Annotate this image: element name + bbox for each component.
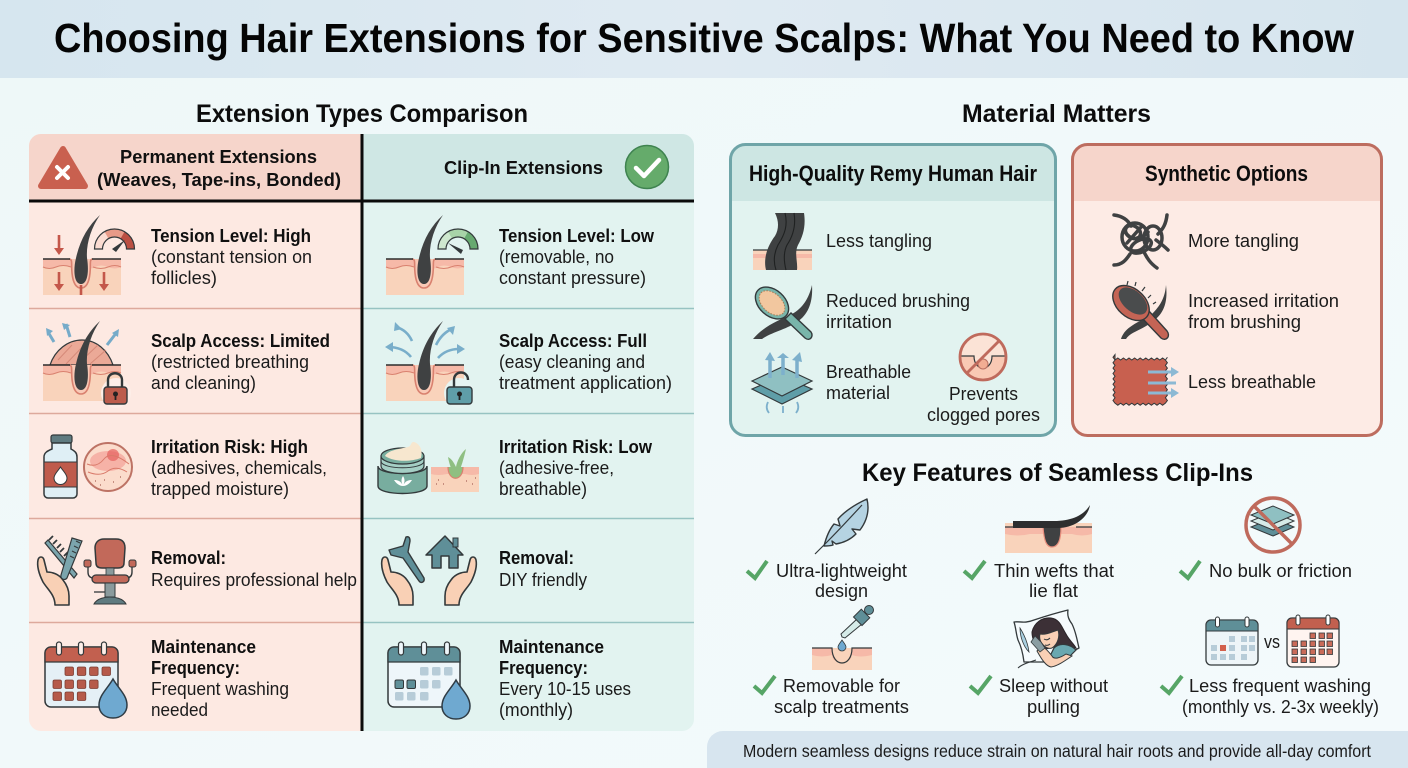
text: tension level low: Tension Level: Low	[499, 226, 655, 246]
text: maintenance monthly: (monthly)	[499, 700, 573, 720]
feature: thin wefts	[964, 505, 1114, 601]
text: irritation risk low: Irritation Risk: Low	[499, 437, 653, 457]
text: irritation risk high: trapped moisture)	[151, 479, 289, 499]
text: maintenance monthly: Maintenance	[499, 637, 604, 657]
icon: sleeping woman on pillow	[1014, 610, 1079, 668]
text: maintenance monthly: Frequency:	[499, 658, 588, 678]
text: breathable material: material	[826, 383, 890, 403]
text: scalp access limited: (restricted breathing	[151, 352, 309, 372]
icon: check	[1161, 676, 1182, 693]
text: irritation risk high: (adhesives, chemicals,	[151, 458, 327, 478]
text: reduced brushing irritation	[826, 291, 970, 332]
text: Ultra-lightweight	[776, 561, 907, 581]
text: removal DIY	[499, 548, 587, 590]
column: permanent extensions	[29, 134, 362, 731]
text: scalp access full: treatment application)	[499, 373, 672, 393]
text: scalp access full	[499, 331, 672, 393]
text: tension level low: (removable, no	[499, 247, 614, 267]
icon: check	[970, 676, 991, 693]
text: No bulk or friction	[1209, 561, 1352, 581]
text: tension level high: Tension Level: High	[151, 226, 311, 246]
feature: removable for treatments	[754, 606, 909, 717]
icon: cream jar and healthy skin	[378, 442, 479, 494]
text: prevents clogged pores: clogged pores	[927, 405, 1040, 425]
text: scalp access full: (easy cleaning and	[499, 352, 645, 372]
title banner	[0, 0, 1408, 78]
text	[994, 561, 1114, 601]
text: prevents clogged pores: Prevents	[949, 384, 1018, 404]
text	[774, 676, 909, 717]
icon: sparse calendar with water drop	[388, 642, 470, 719]
text: Less frequent washing	[1189, 676, 1371, 696]
icon: no clogged pores	[960, 334, 1006, 380]
text: scalp access limited	[151, 331, 330, 393]
heading: permanent extensions: Permanent Extensions	[120, 147, 317, 167]
text: maintenance monthly	[499, 637, 631, 720]
heading: extension types comparison: Extension Types Comparison	[196, 100, 528, 128]
text: lie flat	[1029, 581, 1078, 601]
heading: permanent extensions	[97, 147, 341, 190]
icon: bristle brush with frizz	[1106, 279, 1168, 339]
text: more tangling: More tangling	[1188, 231, 1299, 251]
text: prevents clogged pores	[927, 384, 1040, 425]
icon: feather	[815, 499, 868, 554]
icon: full scalp access	[385, 321, 474, 408]
text: maintenance frequent	[151, 637, 289, 720]
text: irritation risk low: (adhesive-free,	[499, 458, 614, 478]
text: tension level high: (constant tension on	[151, 247, 312, 267]
text: increased irritation: from brushing	[1188, 312, 1301, 332]
icon: check	[1180, 561, 1200, 578]
text: less tangling: Less tangling	[826, 231, 932, 251]
text: (monthly vs. 2-3x weekly)	[1182, 697, 1379, 717]
text: increased irritation: Increased irritation	[1188, 291, 1339, 311]
text: removal professional	[151, 548, 357, 590]
icon: crossed-out layers	[1246, 498, 1300, 552]
panel: synthetic options	[1072, 144, 1382, 436]
text: Thin wefts that	[994, 561, 1114, 581]
heading: permanent extensions: (Weaves, Tape-ins, Bonded)	[97, 170, 341, 190]
icon: green check badge	[626, 146, 668, 188]
heading: key features: Key Features of Seamless Clip-Ins	[862, 459, 1253, 487]
text: maintenance frequent: Frequency:	[151, 658, 240, 678]
text	[1182, 676, 1379, 717]
icon: check	[964, 561, 985, 578]
text: tension level low: constant pressure)	[499, 268, 646, 288]
icon: busy calendar with water drop	[45, 642, 127, 718]
icon: hand, comb and salon chair	[38, 536, 136, 605]
text	[776, 561, 907, 601]
icon: tangled hair knot	[1114, 215, 1168, 268]
icon: check	[747, 561, 767, 578]
icon: non-breathable fabric	[1113, 355, 1179, 405]
feature: no bulk	[1180, 498, 1352, 581]
icon: detangling brush	[749, 281, 812, 339]
text: increased irritation	[1188, 291, 1339, 332]
text: removal DIY: Removal:	[499, 548, 574, 568]
text	[999, 676, 1108, 717]
label: vs: vs	[1264, 632, 1280, 652]
text: reduced brushing irritation: irritation	[826, 312, 892, 332]
icon: warning triangle	[41, 149, 85, 186]
text: removal professional: Removal:	[151, 548, 226, 568]
heading: clip-in extensions: Clip-In Extensions	[444, 158, 603, 178]
heading: remy human hair: High-Quality Remy Human Hair	[749, 161, 1037, 186]
text: irritation risk high: Irritation Risk: High	[151, 437, 308, 457]
text: tension level low	[499, 226, 655, 288]
heading: material matters: Material Matters	[962, 100, 1151, 128]
footer banner	[707, 731, 1408, 768]
icon: teal calendar versus red calendar	[1206, 615, 1339, 667]
feature: less frequent washing	[1161, 615, 1379, 717]
icon: breathable layers	[752, 352, 812, 413]
text: removal professional: Requires professional help	[151, 570, 357, 590]
icon: check	[754, 676, 775, 693]
column: clip-in extensions	[362, 134, 694, 731]
text: maintenance frequent: Frequent washing	[151, 679, 289, 699]
text: scalp access full: Scalp Access: Full	[499, 331, 647, 351]
text: removal DIY: DIY friendly	[499, 570, 587, 590]
icon: low tension follicle	[386, 215, 478, 295]
feature: sleep without pulling	[970, 610, 1108, 717]
text: less breathable: Less breathable	[1188, 372, 1316, 392]
text: scalp treatments	[774, 697, 909, 717]
text: Removable for	[783, 676, 900, 696]
icon: hands with clip and house	[382, 536, 476, 605]
text: scalp access limited: and cleaning)	[151, 373, 256, 393]
icon: flat weft on skin	[1005, 505, 1092, 553]
text: pulling	[1027, 697, 1080, 717]
heading: synthetic options: Synthetic Options	[1145, 161, 1308, 186]
text: maintenance frequent: Maintenance	[151, 637, 256, 657]
icon: high tension follicle	[43, 215, 134, 295]
text: scalp access limited: Scalp Access: Limited	[151, 331, 330, 351]
icon: smooth hair strand	[753, 213, 812, 270]
feature: ultra-lightweight	[747, 499, 907, 601]
text: Sleep without	[999, 676, 1108, 696]
text: tension level high: follicles)	[151, 268, 217, 288]
icon: limited scalp access	[43, 321, 131, 408]
text: tension level high	[151, 226, 312, 288]
panel: comparison table	[29, 134, 694, 731]
text: breathable material: Breathable	[826, 362, 911, 382]
text: reduced brushing irritation: Reduced brushing	[826, 291, 970, 311]
icon: adhesive bottle and irritated scalp	[44, 435, 132, 498]
text: breathable material	[826, 362, 911, 403]
panel: remy human hair	[730, 144, 1056, 436]
text: irritation risk low	[499, 437, 653, 499]
text: maintenance frequent: needed	[151, 700, 208, 720]
text: irritation risk low: breathable)	[499, 479, 587, 499]
icon: dropper over scalp	[812, 606, 874, 670]
text: irritation risk high	[151, 437, 327, 499]
text: design	[815, 581, 868, 601]
text: maintenance monthly: Every 10-15 uses	[499, 679, 631, 699]
